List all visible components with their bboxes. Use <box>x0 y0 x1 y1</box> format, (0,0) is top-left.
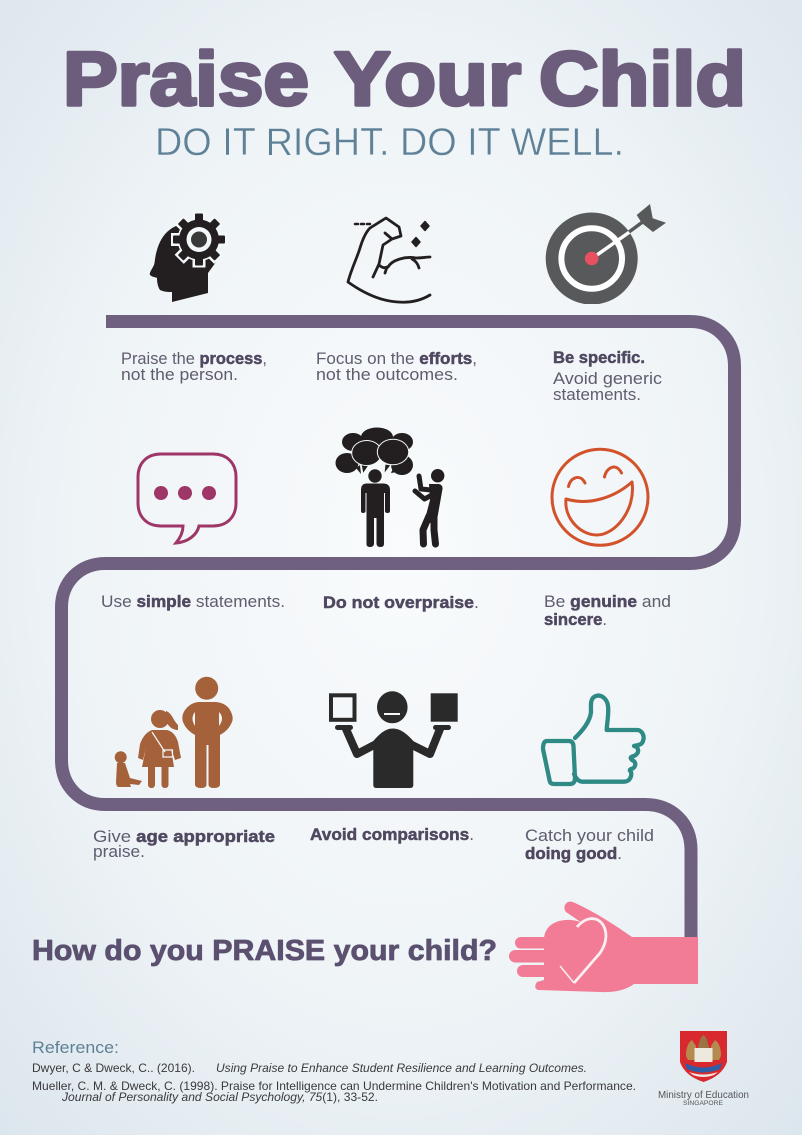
subtitle: DO IT RIGHT. DO IT WELL. <box>155 121 624 164</box>
text: overpraise: Do not overpraise . <box>323 593 479 612</box>
logo text: singapore: SINGAPORE <box>683 1101 723 1107</box>
text: sincere: sincere. <box>544 610 607 629</box>
icon: hand holding heart <box>509 902 698 992</box>
icon: flexed muscle <box>348 218 430 302</box>
logo text: ministry: Ministry of Education <box>658 1090 749 1101</box>
logo: crest <box>680 1031 727 1082</box>
icon: family figures <box>115 677 233 788</box>
text: statements: statements. <box>553 385 641 404</box>
text: efforts: Focus on the efforts, <box>316 349 477 368</box>
text: catch: Catch your child <box>525 826 654 845</box>
text: efforts line 2: not the outcomes. <box>316 365 458 384</box>
icon: laughing face <box>552 449 648 545</box>
text: process line 2: not the person. <box>121 365 238 384</box>
icon: head with gear <box>150 214 225 302</box>
title <box>63 37 746 122</box>
text: genuine: Be genuine and <box>544 592 671 611</box>
text: avoid generic: Avoid generic <box>553 369 663 388</box>
icon: overpraise figures <box>336 428 444 547</box>
icon: target with dart <box>546 204 666 304</box>
reference 2: Mueller, C. M. & Dweck, C. (1998). Praise for Intelligence can Undermine Children's Motivation and Performance. <box>32 1079 636 1093</box>
text: praise: praise. <box>93 842 145 861</box>
icon: comparison figure <box>331 691 458 788</box>
text: process: Praise the process, <box>121 349 267 368</box>
reference heading: Reference: <box>32 1038 119 1057</box>
text: comparisons: Avoid comparisons. <box>310 825 474 844</box>
icon: thumbs up <box>543 696 644 784</box>
text: simple: Use simple statements. <box>101 592 285 611</box>
title: Praise <box>63 37 309 122</box>
text: be specific: Be specific. <box>553 348 645 367</box>
title: Your <box>334 37 521 122</box>
reference 1 title: Using Praise to Enhance Student Resilience and Learning Outcomes. <box>216 1061 587 1075</box>
winding path <box>62 322 734 945</box>
text: age appropriate: Give age appropriate <box>93 827 275 846</box>
question heading: How do you PRAISE your child? <box>32 935 497 967</box>
title: Child <box>539 37 746 122</box>
icon: speech bubble <box>138 454 236 543</box>
reference 2 journal: Journal of Personality and Social Psychology, 75(1), 33-52. <box>61 1090 378 1104</box>
reference 1: Dwyer, C & Dweck, C.. (2016). <box>32 1061 195 1075</box>
text: doing good: doing good. <box>525 844 622 863</box>
